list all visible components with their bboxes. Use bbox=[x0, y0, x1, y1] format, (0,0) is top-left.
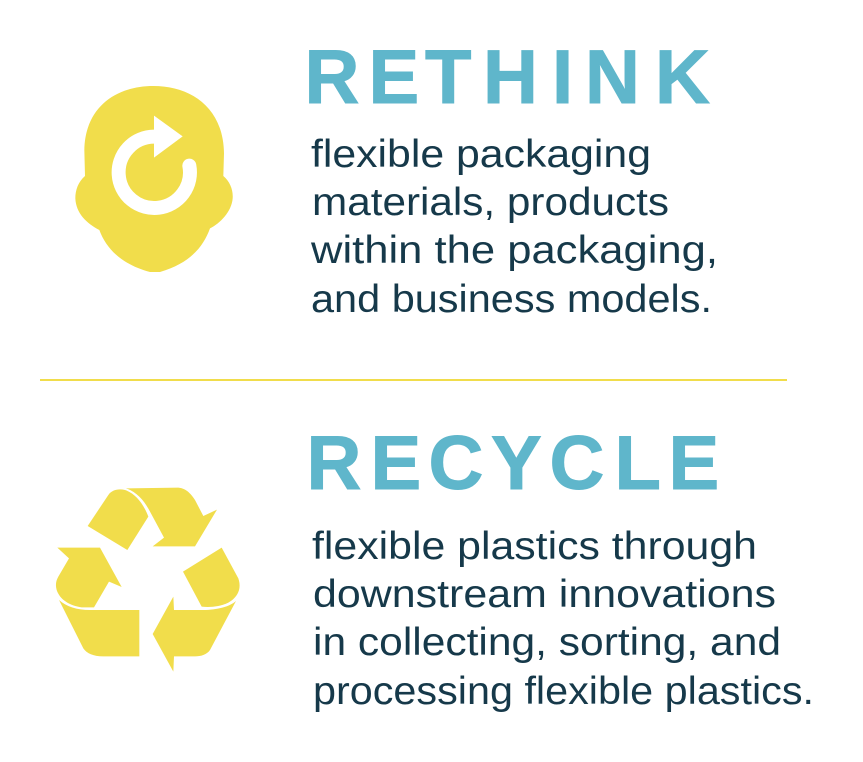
panel: rethink bbox=[75, 35, 718, 321]
text block: rethink description: flexible packaging bbox=[311, 133, 651, 176]
text block: recycle description bbox=[312, 525, 814, 713]
text block: rethink description: within the packaging, bbox=[310, 229, 718, 272]
text block: rethink description: materials, products bbox=[312, 181, 669, 224]
heading: rethink: RETHINK bbox=[304, 35, 710, 120]
icon: head with refresh arrow bbox=[75, 86, 233, 272]
text block: recycle description: downstream innovations bbox=[313, 573, 776, 616]
heading: recycle: RECYCLE bbox=[306, 421, 719, 506]
icon: recycling symbol bbox=[56, 488, 240, 672]
text block: recycle description: in collecting, sorting, and bbox=[313, 621, 781, 664]
text block: rethink description bbox=[310, 133, 718, 321]
panel: recycle bbox=[56, 421, 814, 713]
text block: recycle description: processing flexible plastics. bbox=[313, 670, 814, 713]
text block: recycle description: flexible plastics through bbox=[312, 525, 757, 568]
text block: rethink description: and business models. bbox=[311, 278, 712, 321]
